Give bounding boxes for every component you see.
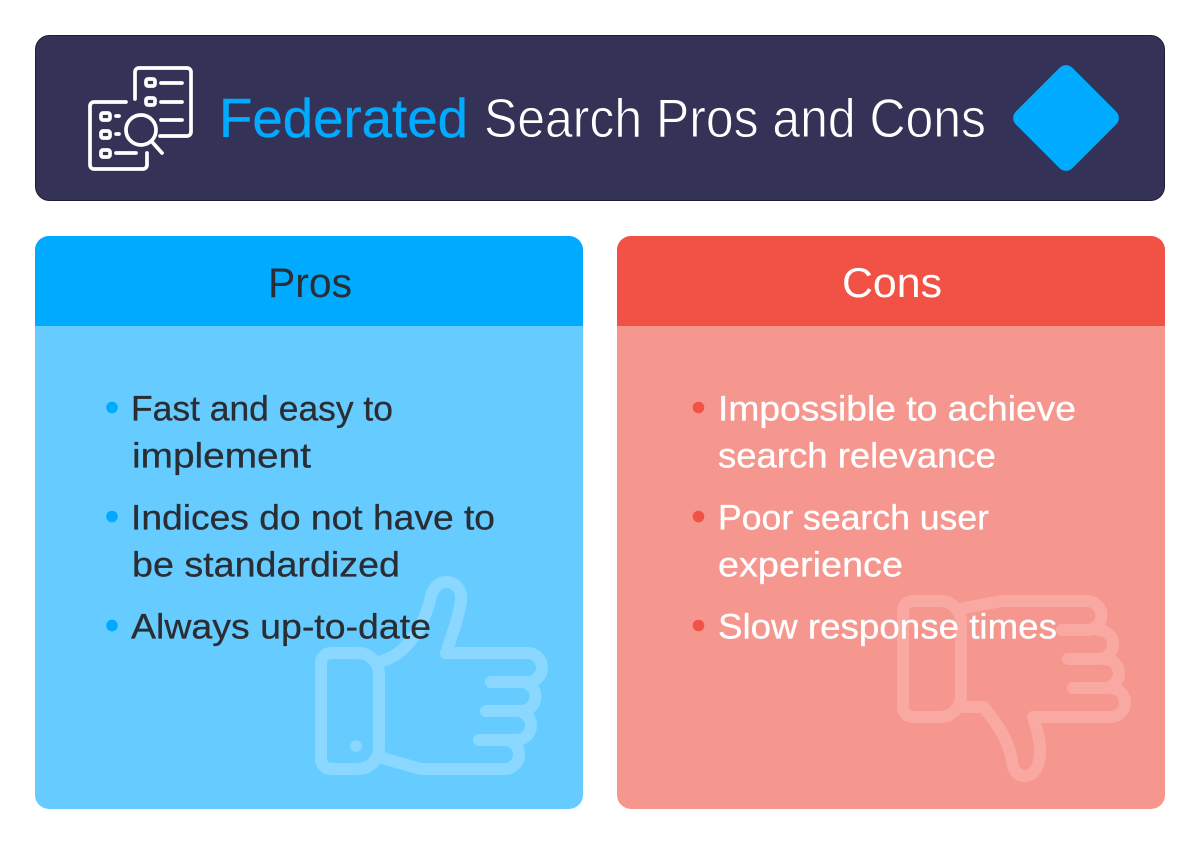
cons bullet list bbox=[693, 390, 1076, 646]
item 2 line 2: experience bbox=[718, 546, 903, 584]
icon: thumbs up bbox=[321, 582, 542, 769]
bullet 3 bbox=[106, 620, 118, 631]
cons header band bbox=[617, 236, 1165, 326]
icon: documents with magnifier bbox=[90, 68, 191, 169]
item 1 line 1: Fast and easy to bbox=[131, 390, 393, 428]
bullet 1 bbox=[693, 402, 704, 413]
item 1 line 2: search relevance bbox=[718, 436, 996, 476]
cons heading: Cons bbox=[842, 259, 942, 306]
panel: cons bbox=[617, 236, 1165, 809]
item 3: Slow response times bbox=[718, 608, 1057, 646]
pros bullet list bbox=[106, 390, 495, 646]
item 2 line 2: be standardized bbox=[132, 546, 400, 584]
title: Federated bbox=[219, 87, 468, 149]
item 1 line 1: Impossible to achieve bbox=[718, 390, 1076, 428]
bullet 2 bbox=[106, 511, 118, 522]
banner bbox=[36, 36, 1164, 200]
panel: pros bbox=[35, 236, 583, 809]
pros header band bbox=[35, 236, 583, 326]
bullet 3 bbox=[693, 620, 704, 631]
bullet 2 bbox=[693, 511, 704, 522]
title: Search Pros and Cons bbox=[484, 87, 986, 149]
item 3: Always up-to-date bbox=[131, 608, 431, 646]
pros heading: Pros bbox=[268, 259, 352, 306]
item 1 line 2: implement bbox=[132, 436, 311, 476]
item 2 line 1: Poor search user bbox=[718, 498, 989, 538]
item 2 line 1: Indices do not have to bbox=[131, 498, 495, 538]
icon: blue diamond bbox=[1009, 61, 1123, 175]
bullet 1 bbox=[106, 402, 118, 413]
icon: thumbs down bbox=[903, 601, 1125, 776]
